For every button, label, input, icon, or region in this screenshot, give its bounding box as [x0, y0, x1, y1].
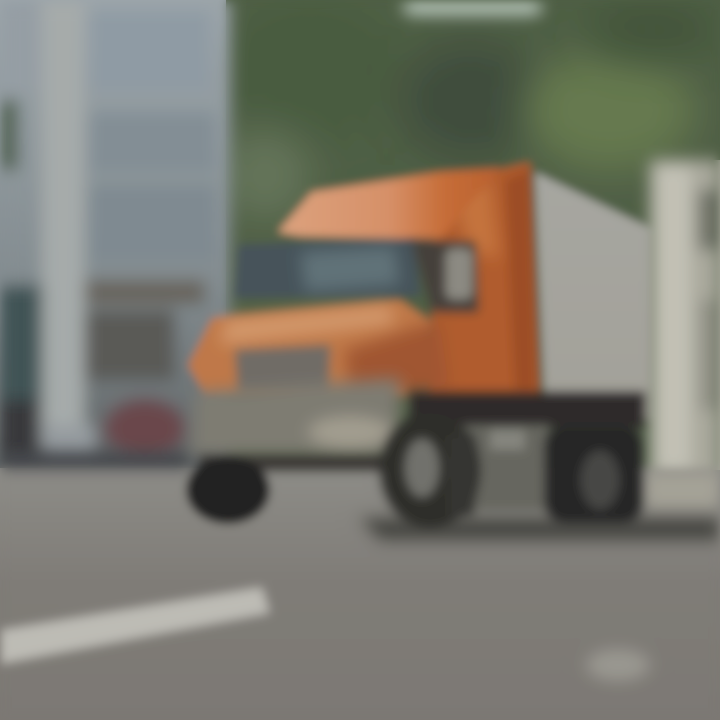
- background: trees and sky: [220, 0, 720, 470]
- truck: rear wheel: [545, 425, 643, 523]
- truck: roof fairing: [278, 168, 500, 240]
- background: building on the left: [0, 0, 230, 470]
- truck: side window and mirror: [412, 240, 478, 312]
- truck: bumper: [190, 378, 400, 455]
- truck: chassis: [200, 455, 410, 471]
- truck: front wheel: [186, 456, 270, 524]
- road: faint marking: [586, 649, 650, 681]
- truck: grille: [235, 345, 330, 392]
- truck: hood: [188, 300, 432, 395]
- background: white pillar on the right: [650, 160, 720, 495]
- road: [0, 452, 720, 720]
- background: parked red car: [105, 400, 185, 456]
- road: lane marking: [0, 587, 270, 664]
- road: truck shadow: [360, 518, 720, 540]
- truck: windshield: [234, 238, 420, 298]
- truck: drive wheel: [380, 412, 480, 528]
- truck: trailer: [535, 172, 650, 420]
- truck: [186, 162, 650, 528]
- truck: cab body rear: [430, 162, 540, 400]
